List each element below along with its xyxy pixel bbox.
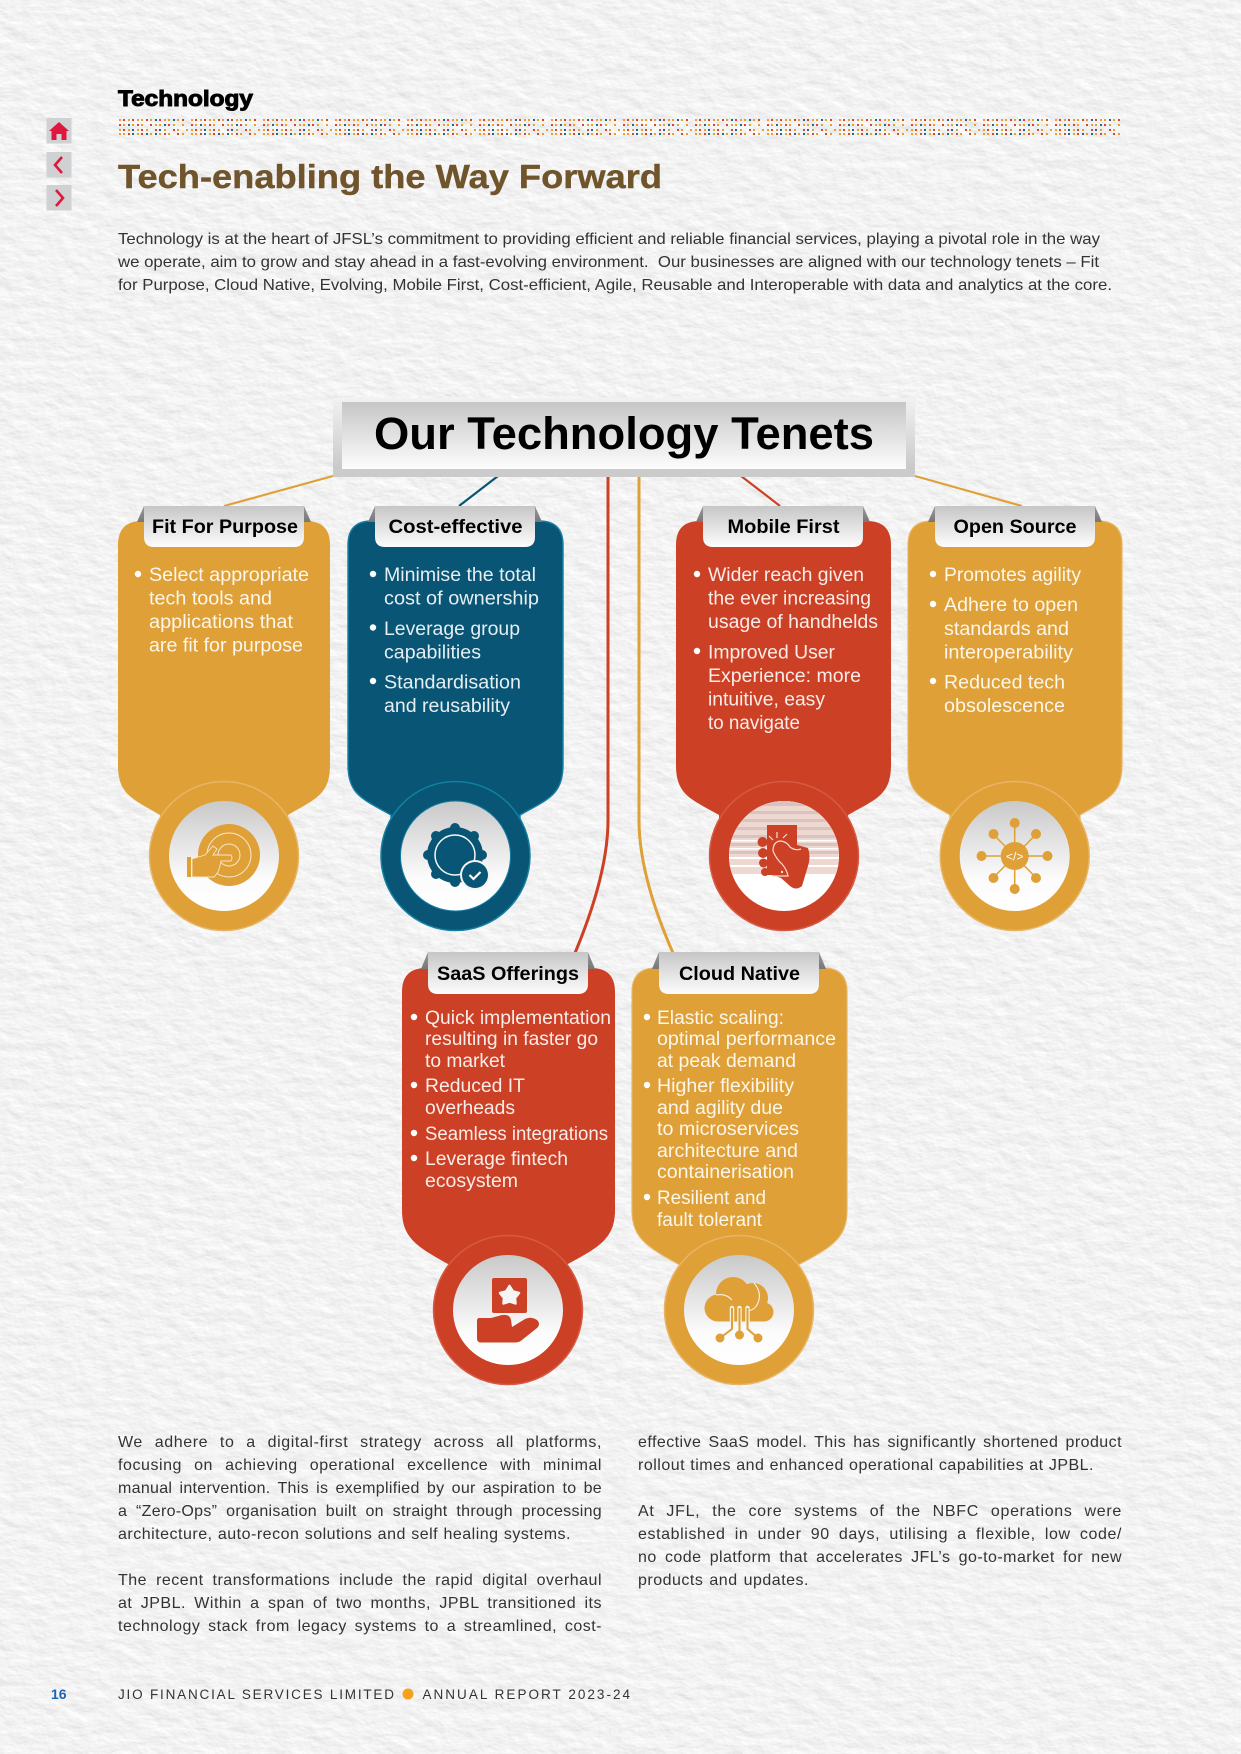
- panel: Cloud Native: [632, 952, 847, 1384]
- heading tab: [428, 952, 588, 994]
- intro paragraph: [117, 231, 1112, 294]
- bullet list: standards and: [944, 619, 1069, 640]
- bullet list: Improved User: [708, 642, 836, 664]
- text block: left column: [118, 1434, 602, 1634]
- bullet list: cost of ownership: [384, 588, 539, 610]
- heading tab: SaaS Offerings: [437, 964, 579, 985]
- bullet list: [370, 565, 539, 717]
- bullet list: containerisation: [657, 1162, 794, 1183]
- bullet list: intuitive, easy: [708, 690, 825, 710]
- text block: left column: focusing on achieving operational excellence with minimal: [118, 1457, 602, 1474]
- footer: [51, 1686, 630, 1702]
- icon: open source hub: </>: [1006, 850, 1023, 864]
- bullet list: to navigate: [708, 713, 800, 734]
- text block: right column: rollout times and enhanced operational capabilities at JPBL.: [638, 1457, 1094, 1474]
- bullet list: Select appropriate: [149, 565, 309, 586]
- bullet list: [694, 565, 878, 734]
- bullet list: Elastic scaling:: [657, 1008, 784, 1029]
- icon: home button: [46, 118, 72, 144]
- icon: next arrow: [46, 185, 72, 210]
- icon: hand on target: [150, 782, 298, 930]
- bullet list: optimal performance: [657, 1029, 836, 1050]
- text block: right column: no code platform that accelerates JFL’s go-to-market for new: [638, 1549, 1122, 1566]
- bullet list: [135, 565, 309, 656]
- icon: back arrow: [46, 152, 72, 178]
- bullet list: interoperability: [944, 642, 1074, 664]
- bullet list: ecosystem: [425, 1171, 518, 1192]
- intro paragraph: Technology is at the heart of JFSL’s commitment to providing efficient and reliable financial services, playing a pivotal role in the way: [118, 231, 1100, 248]
- bullet list: [411, 1008, 611, 1192]
- bullet list: and reusability: [384, 696, 510, 717]
- bullet list: fault tolerant: [657, 1210, 763, 1231]
- bullet list: Seamless integrations: [425, 1124, 608, 1145]
- intro paragraph: we operate, aim to grow and stay ahead in a fast-evolving environment. Our businesses are aligned with our technology tenets – Fit: [117, 254, 1100, 271]
- bullet list: applications that: [149, 612, 294, 633]
- text block: left column: technology stack from legacy systems to a streamlined, cost-: [118, 1618, 602, 1634]
- bullet list: to microservices: [657, 1119, 799, 1140]
- panel: Open Source: [908, 506, 1122, 930]
- heading tab: Cost-effective: [388, 517, 522, 538]
- icon: open source hub: [940, 782, 1089, 930]
- bullet list: to market: [425, 1051, 506, 1072]
- bullet list: and agility due: [657, 1098, 783, 1119]
- text block: left column: manual intervention. This is exemplified by our aspiration to be: [118, 1480, 602, 1497]
- panel: SaaS Offerings: [402, 952, 615, 1384]
- text block: right column: established in under 90 days, utilising a flexible, low code/: [638, 1526, 1122, 1543]
- bullet list: Leverage group: [384, 619, 520, 640]
- heading tab: [935, 506, 1095, 547]
- bullet list: at peak demand: [657, 1051, 796, 1072]
- bullet list: Adhere to open: [944, 595, 1078, 616]
- bullet list: Standardisation: [384, 672, 521, 694]
- heading tab: [375, 506, 535, 547]
- bullet list: Reduced tech: [944, 672, 1065, 694]
- heading tab: Fit For Purpose: [152, 517, 298, 538]
- panel: Cost-effective: [348, 506, 563, 930]
- text block: right column: [638, 1434, 1122, 1589]
- bullet list: Leverage fintech: [425, 1149, 568, 1170]
- intro paragraph: for Purpose, Cloud Native, Evolving, Mobile First, Cost-efficient, Agile, Reusable and Interoperable with data and analytics at the core.: [118, 277, 1112, 294]
- bullet list: obsolescence: [944, 696, 1065, 717]
- text block: left column: at JPBL. Within a span of two months, JPBL transitioned its: [118, 1595, 602, 1612]
- bullet list: are fit for purpose: [149, 636, 303, 656]
- dotted divider strip: [118, 119, 1122, 136]
- bullet list: capabilities: [384, 642, 481, 664]
- icon: gear with check: [381, 782, 530, 930]
- heading tab: Cloud Native: [679, 964, 800, 985]
- navigation icons: [46, 118, 72, 210]
- bullet list: overheads: [425, 1098, 515, 1119]
- text block: left column: We adhere to a digital-first strategy across all platforms,: [118, 1434, 602, 1451]
- icon: hand holding phone: [710, 782, 858, 930]
- bullet list: architecture and: [657, 1141, 798, 1162]
- text block: left column: a “Zero-Ops” organisation built on straight through processing: [118, 1503, 602, 1520]
- bullet list: Wider reach given: [708, 565, 864, 586]
- main heading: Tech-enabling the Way Forward: [118, 158, 662, 195]
- report year: ANNUAL REPORT 2023-24: [422, 1687, 630, 1702]
- text block: right column: products and updates.: [638, 1572, 809, 1589]
- panel: Fit For Purpose: [118, 506, 330, 930]
- text block: left column: The recent transformations include the rapid digital overhaul: [118, 1572, 602, 1589]
- bullet list: Higher flexibility: [657, 1076, 795, 1097]
- bullet list: Minimise the total: [384, 565, 536, 586]
- heading tab: Open Source: [954, 517, 1076, 538]
- bullet list: the ever increasing: [708, 588, 871, 610]
- bullet list: Experience: more: [708, 666, 861, 687]
- page number: 16: [51, 1686, 67, 1702]
- icon: cloud with circuit: [664, 1236, 814, 1384]
- icon: hand offering star box: [434, 1236, 582, 1384]
- bullet list: [644, 1008, 836, 1231]
- bullet list: usage of handhelds: [708, 612, 878, 633]
- panel: Mobile First: [676, 506, 891, 930]
- connector lines: [224, 470, 1022, 953]
- bullet list: Quick implementation: [425, 1008, 611, 1029]
- text block: right column: effective SaaS model. This has significantly shortened product: [638, 1434, 1122, 1451]
- heading tab: Mobile First: [728, 517, 840, 538]
- bullet list: tech tools and: [149, 588, 272, 610]
- footer separator dot: [402, 1688, 414, 1700]
- text block: right column: At JFL, the core systems of the NBFC operations were: [638, 1503, 1122, 1520]
- report name: JIO FINANCIAL SERVICES LIMITED: [118, 1687, 394, 1702]
- bullet list: Resilient and: [657, 1188, 766, 1209]
- bullet list: resulting in faster go: [425, 1029, 598, 1050]
- heading tab: [703, 506, 863, 547]
- bullet list: Reduced IT: [425, 1076, 525, 1097]
- title banner: Our Technology Tenets: [333, 398, 915, 477]
- heading tab: [659, 952, 819, 994]
- text block: left column: architecture, auto-recon solutions and self healing systems.: [118, 1526, 571, 1543]
- bullet list: Promotes agility: [944, 565, 1081, 586]
- bullet list: [930, 565, 1081, 717]
- heading tab: [144, 506, 304, 547]
- title banner: Our Technology Tenets: Our Technology Tenets: [374, 408, 874, 459]
- section label: Technology: Technology: [118, 86, 254, 111]
